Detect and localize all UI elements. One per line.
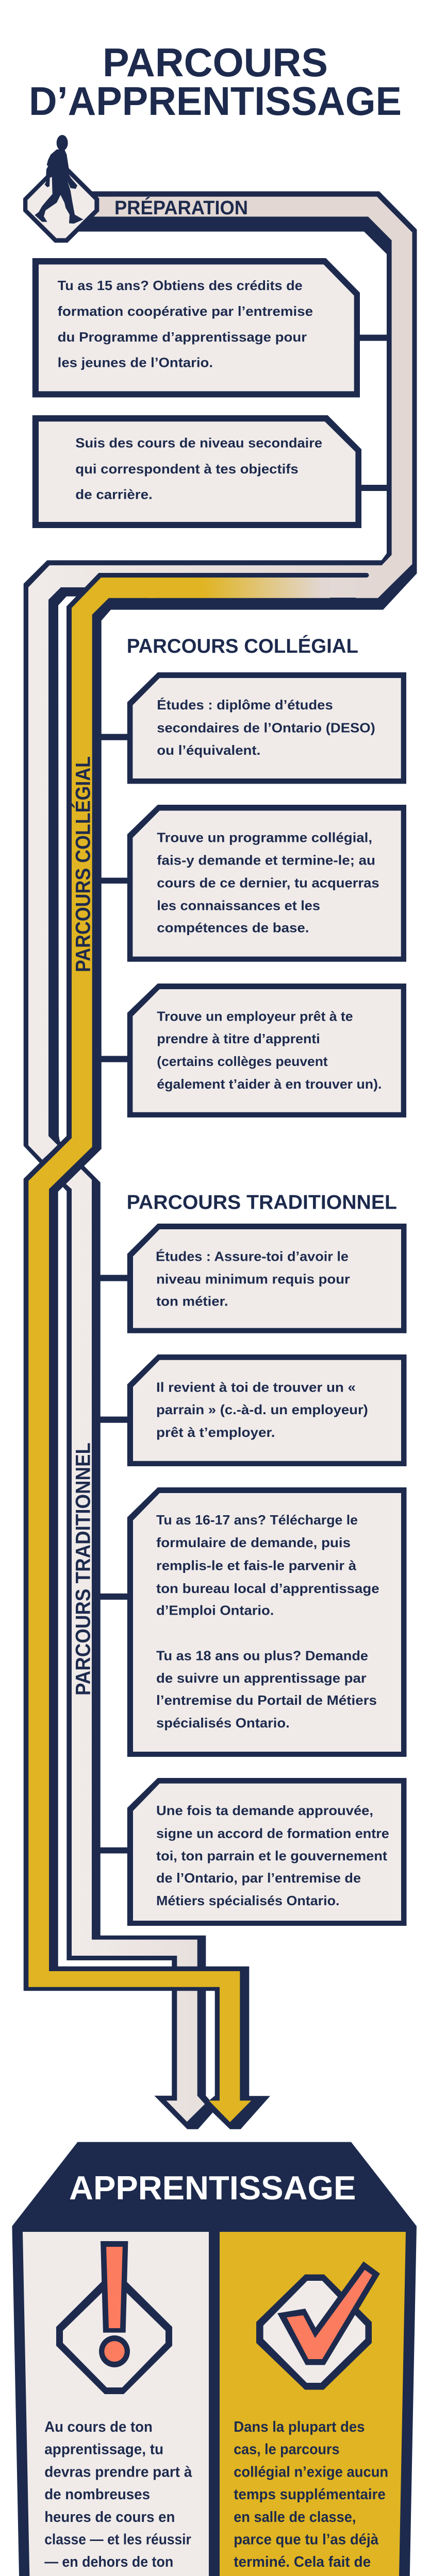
- text: right column: Dans la plupart des: [234, 2419, 365, 2435]
- panel: college step 2: Trouve un programme collégial,: [157, 830, 372, 845]
- panel: college step 3: (certains collèges peuvent: [157, 1054, 328, 1069]
- text: left column: classe — et les réussir: [44, 2532, 191, 2548]
- title: D’APPRENTISSAGE: [29, 78, 402, 124]
- panel: traditional step 3: l’entremise du Portail de Métiers: [156, 1692, 377, 1708]
- panel: traditional step 4: Une fois ta demande approuvée,: [156, 1803, 373, 1818]
- panel: apprentissage house: [12, 2142, 417, 2576]
- panel: traditional step 3: de suivre un apprentissage par: [156, 1670, 367, 1686]
- icon: check mark on octagon: [256, 2261, 380, 2389]
- panel: traditional step 4: [100, 1778, 406, 1926]
- text: left column: [44, 2419, 194, 2576]
- panel: traditional step 3: spécialisés Ontario.: [156, 1715, 290, 1731]
- text: left column: apprentissage, tu: [44, 2442, 163, 2458]
- panel: college step 3: prendre à titre d’apprenti: [157, 1031, 320, 1046]
- panel: traditional step 4: signe un accord de formation entre: [156, 1825, 389, 1841]
- panel: preparation step 2: Suis des cours de niveau secondaire: [75, 435, 322, 450]
- pathway: college band fill: [28, 578, 330, 2122]
- panel: college step 2: cours de ce dernier, tu acquerras: [157, 875, 379, 890]
- heading: parcours traditionnel: PARCOURS TRADITIONNEL: [127, 1191, 397, 1213]
- panel: preparation step 2: de carrière.: [75, 487, 153, 502]
- panel: preparation step 1: Tu as 15 ans? Obtiens des crédits de: [58, 278, 303, 293]
- text: left column: Au cours de ton: [44, 2419, 153, 2435]
- text: right column: cas, le parcours: [234, 2442, 339, 2458]
- panel: preparation step 1: du Programme d’apprentissage pour: [58, 329, 307, 345]
- title: PARCOURS: [103, 40, 328, 85]
- text: right column: terminé. Cela fait de: [234, 2554, 371, 2570]
- vertical label: parcours traditionnel: PARCOURS TRADITIONNEL: [72, 1443, 95, 1696]
- panel: traditional step 2: prêt à t’employer.: [156, 1425, 275, 1440]
- panel: traditional step 4: de l’Ontario, par l’entremise de: [156, 1870, 361, 1886]
- panel: traditional step 1: Études : Assure-toi d’avoir le: [156, 1248, 349, 1264]
- text: right column: temps supplémentaire: [234, 2486, 386, 2503]
- panel: preparation step 1: formation coopérative par l’entremise: [58, 303, 313, 319]
- text: left column: heures de cours en: [44, 2509, 175, 2526]
- right column panel: [220, 2232, 406, 2576]
- panel: traditional step 4: toi, ton parrain et le gouvernement: [156, 1848, 387, 1863]
- text: right column: [234, 2419, 388, 2576]
- panel: traditional step 3: d’Emploi Ontario.: [156, 1603, 274, 1618]
- panel: college step 2: compétences de base.: [157, 920, 309, 936]
- panel: traditional step 3: formulaire de demande, puis: [156, 1535, 351, 1550]
- pathway: college band outline: [24, 573, 369, 2129]
- panel: college step 3: Trouve un employeur prêt à te: [157, 1009, 353, 1024]
- panel: preparation step 1: les jeunes de l’Ontario.: [58, 354, 213, 370]
- panel: traditional step 2: Il revient à toi de trouver un «: [156, 1380, 356, 1395]
- icon: walker on octagon: [23, 135, 99, 243]
- panel: college step 3: [101, 984, 406, 1117]
- panel: traditional step 3: remplis-le et fais-le parvenir à: [156, 1557, 357, 1573]
- icon: exclamation mark on octagon: [56, 2241, 172, 2394]
- heading: apprentissage: APPRENTISSAGE: [69, 2169, 356, 2207]
- panel: traditional step 1: [100, 1224, 406, 1333]
- pathway: preparation band: [77, 191, 417, 609]
- heading: préparation: PRÉPARATION: [114, 196, 248, 219]
- text: left column: devras prendre part à: [44, 2464, 192, 2480]
- panel: traditional step 1: niveau minimum requis pour: [156, 1271, 350, 1286]
- panel: traditional step 2: parrain » (c.-à-d. un employeur): [156, 1402, 368, 1417]
- panel: college step 3: également t’aider à en trouver un).: [157, 1076, 382, 1092]
- text: left column: — en dehors de ton: [44, 2554, 173, 2570]
- panel: traditional step 3: [100, 1487, 406, 1757]
- panel: college step 1: ou l’équivalent.: [157, 742, 260, 758]
- text: right column: en salle de classe,: [234, 2509, 356, 2526]
- panel: college step 2: [101, 805, 406, 962]
- heading: parcours collégial: PARCOURS COLLÉGIAL: [127, 635, 358, 657]
- panel: preparation step 2: [32, 415, 387, 528]
- panel: college step 2: fais-y demande et termine-le; au: [157, 853, 375, 868]
- panel: college step 1: secondaires de l’Ontario (DESO): [157, 720, 375, 735]
- panel: college step 2: les connaissances et les: [157, 897, 320, 913]
- pathway: traditional band, upper part: [24, 561, 384, 1163]
- panel: college step 1: [101, 672, 406, 784]
- left column panel: [23, 2232, 209, 2576]
- panel: traditional step 2: [100, 1354, 406, 1466]
- text: right column: collégial n’exige aucun: [234, 2464, 388, 2480]
- vertical label: parcours collégial: PARCOURS COLLÉGIAL: [71, 756, 95, 972]
- house shape: [12, 2142, 417, 2576]
- panel: traditional step 3: ton bureau local d’apprentissage: [156, 1581, 379, 1596]
- panel: traditional step 4: Métiers spécialisés Ontario.: [156, 1893, 339, 1908]
- panel: traditional step 1: ton métier.: [156, 1294, 228, 1309]
- title: [29, 40, 402, 124]
- panel: preparation step 1: [32, 258, 387, 397]
- text: right column: parce que tu l’as déjà: [234, 2532, 379, 2548]
- panel: traditional step 3: Tu as 16-17 ans? Télécharge le: [156, 1512, 358, 1528]
- panel: preparation step 2: qui correspondent à tes objectifs: [75, 461, 299, 477]
- text: left column: de nombreuses: [44, 2486, 150, 2503]
- panel: college step 1: Études : diplôme d’études: [157, 697, 333, 713]
- panel: traditional step 3: Tu as 18 ans ou plus? Demande: [156, 1648, 368, 1663]
- pathway: traditional band, lower part: [57, 1166, 217, 2129]
